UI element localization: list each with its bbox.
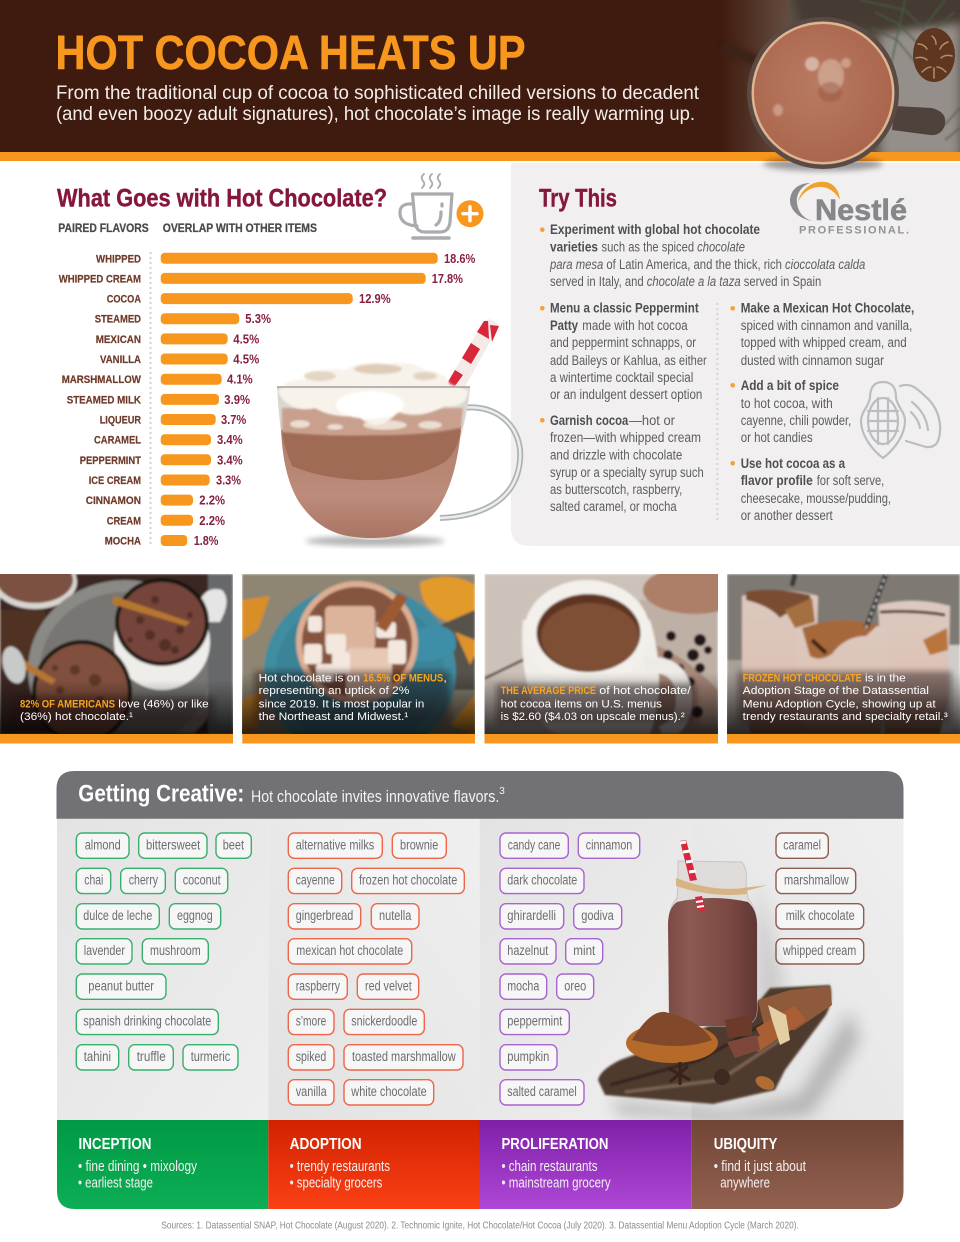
photo card: frozen hot chocolate: trendy restaurants and specialty retail.³ xyxy=(743,711,948,723)
tag xyxy=(500,904,564,929)
sources footnote: Sources: 1. Datassential SNAP, Hot Chocolate (August 2020). 2. Technomic Ignite, Hot Chocolate/Hot Cocoa (July 2020). 3. Datassential Menu Adoption Cycle (March 2020). xyxy=(161,1220,799,1232)
tag xyxy=(344,1080,434,1105)
photo card: 16.5% of menus: representing an uptick of 2% xyxy=(259,685,409,697)
column headings: OVERLAP WITH OTHER ITEMS xyxy=(163,221,317,235)
tag xyxy=(557,974,594,999)
photo card: 82% of americans xyxy=(0,574,233,744)
tag: oreo xyxy=(564,978,586,993)
tag: brownie xyxy=(400,837,438,852)
tag: hazelnut xyxy=(507,943,549,958)
tag xyxy=(344,1009,424,1035)
subtitle xyxy=(56,83,700,125)
tag: snickerdoodle xyxy=(351,1014,417,1029)
bar: cream: CREAM xyxy=(107,515,141,527)
heading: what goes with hot chocolate: What Goes with Hot Chocolate? xyxy=(57,184,387,212)
text block: experiment with global varieties: such as the spiced chocolate xyxy=(602,240,745,254)
bar: mexican: 4.5% xyxy=(233,332,259,346)
tag xyxy=(500,1045,557,1070)
tag: spiked xyxy=(296,1049,326,1064)
tag xyxy=(288,1045,334,1070)
tag xyxy=(76,868,111,894)
tag: vanilla xyxy=(296,1084,327,1099)
panel header: Getting Creative: xyxy=(78,781,244,808)
tag: frozen hot chocolate xyxy=(359,873,457,888)
text block: experiment with global varieties xyxy=(540,222,865,289)
tag: cinnamon xyxy=(586,837,632,852)
photo card: frozen hot chocolate xyxy=(727,574,960,744)
bar: vanilla: VANILLA xyxy=(100,354,141,366)
bar: cocoa: 12.9% xyxy=(359,292,391,306)
tag xyxy=(288,868,342,894)
tag xyxy=(500,833,568,858)
tag: mexican hot chocolate xyxy=(296,943,403,958)
tag: coconut xyxy=(183,873,221,888)
heading: try this: Try This xyxy=(539,184,617,212)
stage: inception: INCEPTION xyxy=(78,1136,152,1153)
photo card: frozen hot chocolate: is in the xyxy=(865,673,906,685)
tag xyxy=(76,1045,119,1070)
text block: mexican hot chocolate: dusted with cinnamon sugar xyxy=(741,353,884,368)
tag: pumpkin xyxy=(507,1049,549,1064)
photo card: 82% of americans: 82% OF AMERICANS xyxy=(20,698,115,710)
text block: add spice: to hot cocoa, with xyxy=(741,396,833,411)
bar: ice cream: ICE CREAM xyxy=(89,475,141,487)
bar: marshmallow xyxy=(62,373,253,387)
text block: garnish cocoa: —hot or xyxy=(629,413,676,428)
photo card: average price: hot cocoa items on U.S. menus xyxy=(501,698,662,710)
tag: white chocolate xyxy=(350,1084,427,1099)
text block: mexican hot chocolate: spiced with cinnamon and vanilla, xyxy=(741,318,912,333)
tag xyxy=(566,939,603,964)
text block: garnish cocoa: Garnish cocoa xyxy=(550,413,629,428)
stage: adoption: • specialty grocers xyxy=(290,1176,382,1192)
tag: nutella xyxy=(379,908,412,923)
bar: cream xyxy=(107,514,225,528)
tag: beet xyxy=(223,837,244,852)
text block: experiment with global varieties: varieties xyxy=(550,240,598,254)
tag xyxy=(352,868,464,894)
tag xyxy=(344,1045,463,1070)
text block: peppermint patty: made with hot cocoa xyxy=(582,318,688,333)
tag xyxy=(500,939,556,964)
tag xyxy=(175,868,228,894)
bar: peppermint: PEPPERMINT xyxy=(80,455,141,467)
bar: steamed: 5.3% xyxy=(245,312,271,326)
tag xyxy=(183,1045,238,1070)
tag: almond xyxy=(85,837,121,852)
bar: steamed: STEAMED xyxy=(95,314,141,326)
title: HOT COCOA HEATS UP xyxy=(56,27,526,80)
tag xyxy=(357,974,419,999)
subtitle: (and even boozy adult signatures), hot chocolate’s image is really warming up. xyxy=(56,104,695,125)
flavors: ubiquity tags xyxy=(776,833,864,964)
tag xyxy=(139,833,207,858)
bar: steamed milk: 3.9% xyxy=(224,393,250,407)
photo card: 16.5% of menus: the Northeast and Midwest.¹ xyxy=(259,711,409,723)
panel header xyxy=(56,771,904,819)
column headings xyxy=(58,221,317,235)
stage: adoption xyxy=(268,1120,480,1209)
text block: peppermint patty: Patty xyxy=(550,318,578,333)
text block: add spice: cayenne, chili powder, xyxy=(741,413,851,428)
text block: add spice xyxy=(730,378,851,445)
text block: flavor profile: flavor profile xyxy=(741,473,813,488)
stage: adoption: ADOPTION xyxy=(290,1136,362,1153)
tag: mint xyxy=(573,943,596,958)
tag xyxy=(500,868,584,894)
tag xyxy=(288,904,361,929)
tag xyxy=(500,974,547,999)
tag xyxy=(129,1045,173,1070)
panel: getting creative xyxy=(56,771,904,1209)
tag: tahini xyxy=(84,1049,111,1064)
photo: chocolate jar with cocoa and wooden board xyxy=(598,840,860,1122)
bar: liqueur: LIQUEUR xyxy=(100,414,141,426)
tag: dulce de leche xyxy=(83,908,152,923)
bar chart: paired flavors xyxy=(59,252,475,548)
tag: gingerbread xyxy=(296,908,353,923)
text block: peppermint patty: or an indulgent dessert option xyxy=(550,387,702,402)
header banner xyxy=(0,0,960,161)
bar: caramel: 3.4% xyxy=(217,433,243,447)
stage: inception: • earliest stage xyxy=(78,1176,153,1192)
stage: inception xyxy=(57,1120,268,1209)
tag xyxy=(500,1009,569,1035)
bar: whipped cream: WHIPPED CREAM xyxy=(59,273,141,285)
flavors: proliferation tags xyxy=(500,833,640,1105)
tag: milk chocolate xyxy=(786,908,855,923)
tag xyxy=(169,904,221,929)
tag xyxy=(142,939,208,964)
tag: lavender xyxy=(84,943,125,958)
bar: steamed milk xyxy=(67,393,250,407)
tag: peanut butter xyxy=(88,978,154,993)
bar: ice cream: 3.3% xyxy=(216,474,241,488)
tag xyxy=(76,904,159,929)
text block: experiment with global varieties: para mesa of Latin America, and the thick, rich cioccolata calda xyxy=(549,257,865,272)
photo card: average price: is $2.60 ($4.03 on upscale menus).² xyxy=(501,711,685,723)
text block: peppermint patty: a wintertime cocktail special xyxy=(550,370,693,385)
text block: garnish cocoa xyxy=(540,413,704,514)
photo card: 16.5% of menus: since 2019. It is most popular in xyxy=(259,698,424,710)
bar: cinnamon: 2.2% xyxy=(199,494,225,508)
text block: flavor profile xyxy=(730,456,891,523)
tag: red velvet xyxy=(365,978,412,993)
stage: proliferation: • mainstream grocery xyxy=(502,1176,611,1192)
tag: turmeric xyxy=(191,1049,231,1064)
stage: ubiquity: anywhere xyxy=(720,1176,770,1192)
text block: experiment with global varieties: Experiment with global hot chocolate xyxy=(550,222,760,237)
photo card: frozen hot chocolate: Menu Adoption Cycle, showing up at xyxy=(743,698,937,710)
logo: nestle professional xyxy=(790,182,909,236)
text block: mexican hot chocolate: Make a Mexican Hot Chocolate, xyxy=(741,301,914,316)
stage: proliferation: PROLIFERATION xyxy=(502,1136,608,1153)
tag xyxy=(392,833,446,858)
text block: mexican hot chocolate xyxy=(730,301,914,368)
peppermint stick xyxy=(443,319,499,390)
photo card: frozen hot chocolate: Adoption Stage of the Datassential xyxy=(743,685,929,697)
photo card: average price xyxy=(484,574,718,744)
stage: proliferation xyxy=(480,1120,692,1209)
subtitle: From the traditional cup of cocoa to sophisticated chilled versions to decadent xyxy=(56,83,700,104)
tag xyxy=(288,1009,334,1035)
bar: cocoa xyxy=(107,292,391,306)
text block: mexican hot chocolate: topped with whipped cream, and xyxy=(741,335,907,350)
tag: s’more xyxy=(296,1014,326,1029)
bar: cocoa: COCOA xyxy=(107,294,141,306)
panel header: 3 xyxy=(499,786,505,797)
bar: marshmallow: 4.1% xyxy=(227,373,253,387)
flavors: adoption tags xyxy=(288,833,464,1105)
text block: peppermint patty: add Baileys or Kahlua, as either xyxy=(550,353,707,368)
photo card: 82% of americans: love (46%) or like xyxy=(118,698,209,710)
tag: mushroom xyxy=(150,943,201,958)
photo card: average price: of hot chocolate/ xyxy=(599,685,692,697)
tag: truffle xyxy=(137,1049,166,1064)
tag xyxy=(578,833,640,858)
photo: glass mug of hot chocolate xyxy=(277,319,520,546)
logo: nestle professional: PROFESSIONAL. xyxy=(799,224,909,236)
tag: cayenne xyxy=(296,873,335,888)
bar: mexican xyxy=(96,332,259,346)
text block: flavor profile: cheesecake, mousse/pudding, xyxy=(741,491,891,506)
text block: peppermint patty xyxy=(540,301,707,402)
photo card: 16.5% of menus xyxy=(242,574,475,760)
photo card: 82% of americans: (36%) hot chocolate.¹ xyxy=(20,711,133,723)
stage: ubiquity: • find it just about xyxy=(714,1159,806,1175)
stage: ubiquity: UBIQUITY xyxy=(714,1136,778,1153)
panel: try this background xyxy=(511,163,960,546)
bar: peppermint: 3.4% xyxy=(217,453,243,467)
text block: flavor profile: or another dessert xyxy=(741,508,833,523)
photo card: 16.5% of menus: 16.5% OF MENUS xyxy=(363,673,443,685)
bar: peppermint xyxy=(80,453,243,467)
tag: candy cane xyxy=(508,837,560,852)
tag xyxy=(288,833,382,858)
tag xyxy=(288,974,347,999)
text block: garnish cocoa: as butterscotch, raspberry, xyxy=(550,482,682,497)
tag: alternative milks xyxy=(296,837,375,852)
tag xyxy=(216,833,251,858)
bar: mexican: MEXICAN xyxy=(96,334,141,346)
tag: dark chocolate xyxy=(507,873,577,888)
tag xyxy=(76,833,129,858)
bar: whipped cream xyxy=(59,272,463,286)
tag: ghirardelli xyxy=(507,908,556,923)
tag xyxy=(76,974,166,999)
bar: liqueur: 3.7% xyxy=(221,413,246,427)
tag: bittersweet xyxy=(146,837,201,852)
bar: ice cream xyxy=(89,474,241,488)
tag: eggnog xyxy=(177,908,213,923)
column headings: PAIRED FLAVORS xyxy=(58,221,149,235)
tag xyxy=(121,868,165,894)
tag: raspberry xyxy=(296,978,340,993)
stage: adoption: • trendy restaurants xyxy=(290,1159,390,1175)
tag: toasted marshmallow xyxy=(352,1049,456,1064)
bar: cream: 2.2% xyxy=(199,514,225,528)
text block: garnish cocoa: frozen—with whipped cream xyxy=(550,430,701,445)
bar: mocha: 1.8% xyxy=(194,534,218,548)
tag xyxy=(574,904,622,929)
bar: whipped xyxy=(96,252,475,266)
bar: caramel xyxy=(94,433,243,447)
logo: nestle professional: Nestlé xyxy=(815,194,907,227)
bar: liqueur xyxy=(100,413,246,427)
text block: peppermint patty: Menu a classic Peppermint xyxy=(550,301,699,316)
bar: vanilla: 4.5% xyxy=(233,352,259,366)
photo card: 16.5% of menus: , xyxy=(444,673,447,685)
stage: inception: • fine dining • mixology xyxy=(78,1159,198,1175)
tag: marshmallow xyxy=(784,873,849,888)
flavors: inception tags xyxy=(76,833,251,1070)
tag xyxy=(500,1080,584,1105)
tag xyxy=(371,904,419,929)
bar: mocha xyxy=(105,534,218,548)
photo card: 16.5% of menus: Hot chocolate is on xyxy=(259,673,360,685)
tag: chai xyxy=(84,873,103,888)
tag: mocha xyxy=(507,978,540,993)
text block: peppermint patty: and peppermint schnapps, or xyxy=(550,335,696,350)
tag xyxy=(288,939,412,964)
text block: garnish cocoa: syrup or a specialty syrup such xyxy=(550,465,704,480)
tag: peppermint xyxy=(507,1014,563,1029)
bar: vanilla xyxy=(100,352,259,366)
bar: steamed milk: STEAMED MILK xyxy=(67,394,141,406)
bar: marshmallow: MARSHMALLOW xyxy=(62,374,142,386)
tag: whipped cream xyxy=(782,943,856,958)
text block: flavor profile: for soft serve, xyxy=(817,473,884,488)
tag: salted caramel xyxy=(507,1084,577,1099)
bar: whipped: 18.6% xyxy=(444,252,475,266)
text block: flavor profile: Use hot cocoa as a xyxy=(741,456,845,471)
bar: cinnamon xyxy=(86,494,225,508)
stage: ubiquity xyxy=(692,1120,904,1209)
bar: caramel: CARAMEL xyxy=(94,435,141,447)
bar: whipped cream: 17.8% xyxy=(432,272,463,286)
icon: coffee cup with plus xyxy=(400,174,484,238)
text block: add spice: or hot candies xyxy=(741,430,813,445)
tag: godiva xyxy=(581,908,614,923)
bar: whipped: WHIPPED xyxy=(96,253,141,265)
tag: spanish drinking chocolate xyxy=(83,1014,211,1029)
tag xyxy=(76,939,132,964)
text block: add spice: Add a bit of spice xyxy=(741,378,839,393)
photo: cup of cocoa from above xyxy=(747,17,955,171)
tag: caramel xyxy=(783,837,821,852)
icon: cocoa pod xyxy=(861,382,940,458)
stage: proliferation: • chain restaurants xyxy=(502,1159,598,1175)
tag: cherry xyxy=(129,873,158,888)
bar: steamed xyxy=(95,312,271,326)
photo card: frozen hot chocolate: FROZEN HOT CHOCOLATE xyxy=(743,673,862,685)
tag xyxy=(76,1009,218,1035)
photo card: average price: THE AVERAGE PRICE xyxy=(501,685,596,697)
text block: garnish cocoa: salted caramel, or mocha xyxy=(550,499,677,514)
text block: experiment with global varieties: served in Italy, and chocolate a la taza served in Spain xyxy=(550,274,821,289)
tag xyxy=(288,1080,334,1105)
text block: garnish cocoa: and drizzle with chocolate xyxy=(550,448,682,462)
bar: mocha: MOCHA xyxy=(105,536,141,548)
bar: cinnamon: CINNAMON xyxy=(86,495,141,507)
panel header: Hot chocolate invites innovative flavors. xyxy=(251,787,499,806)
